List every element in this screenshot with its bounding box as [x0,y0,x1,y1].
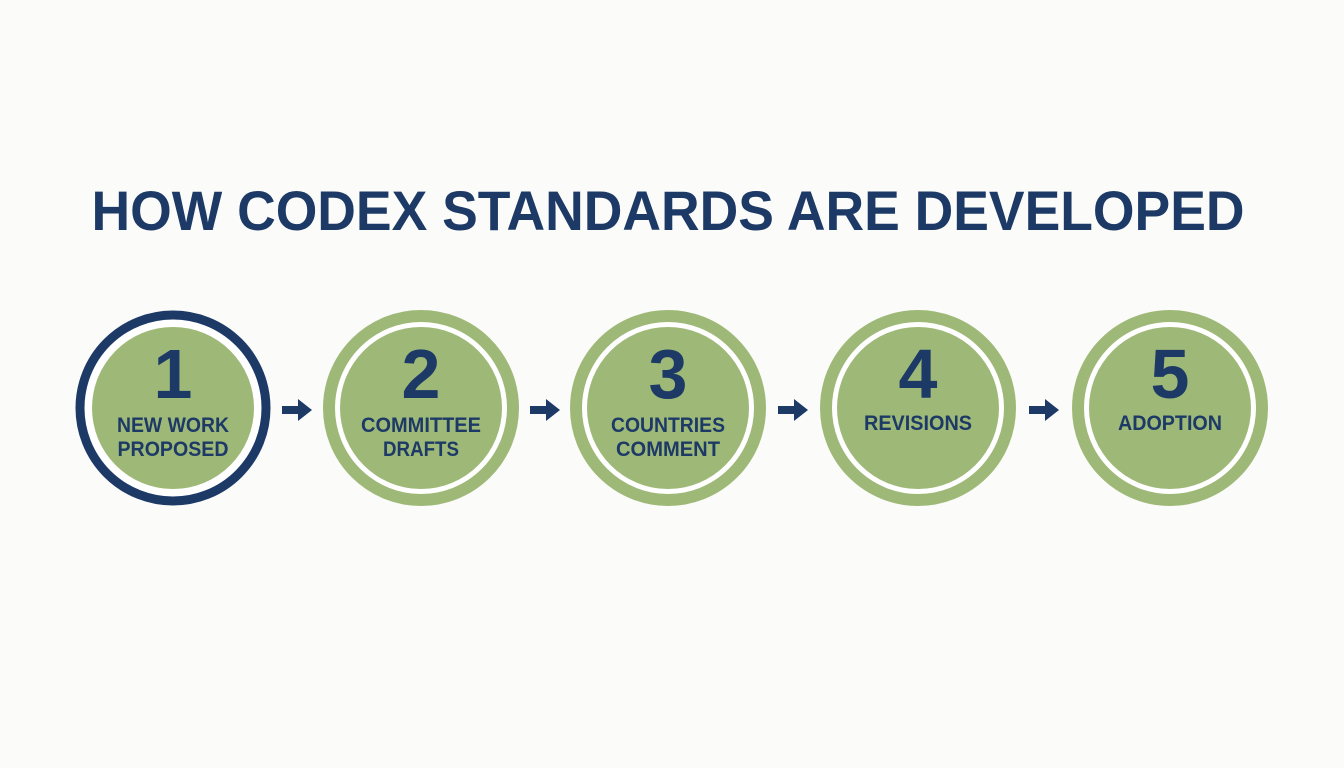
step 3: countries comment: COMMENT [616,438,720,461]
step 2: committee drafts [329,316,513,500]
step 1: new work proposed: 1 [154,335,192,413]
arrow 3 [778,399,808,421]
step 4: revisions: REVISIONS [864,412,972,435]
step 2: committee drafts: COMMITTEE [361,414,481,437]
arrow 2 [530,399,560,421]
step 5: adoption: ADOPTION [1118,412,1222,435]
step 1: new work proposed: PROPOSED [118,438,228,461]
step 3: countries comment: 3 [649,335,687,413]
title: HOW CODEX STANDARDS ARE DEVELOPED [92,179,1244,242]
step 3: countries comment [576,316,760,500]
step 4: revisions: 4 [899,335,938,413]
arrow 4 [1029,399,1059,421]
step 5: adoption: 5 [1151,335,1189,413]
step 4: revisions [826,316,1010,500]
step 2: committee drafts: DRAFTS [383,438,459,461]
arrow 1 [282,399,312,421]
step 5: adoption [1078,316,1262,500]
step 2: committee drafts: 2 [402,335,440,413]
step 1: new work proposed: NEW WORK [117,414,229,437]
step 3: countries comment: COUNTRIES [611,414,725,437]
step 1: new work proposed [80,315,266,501]
